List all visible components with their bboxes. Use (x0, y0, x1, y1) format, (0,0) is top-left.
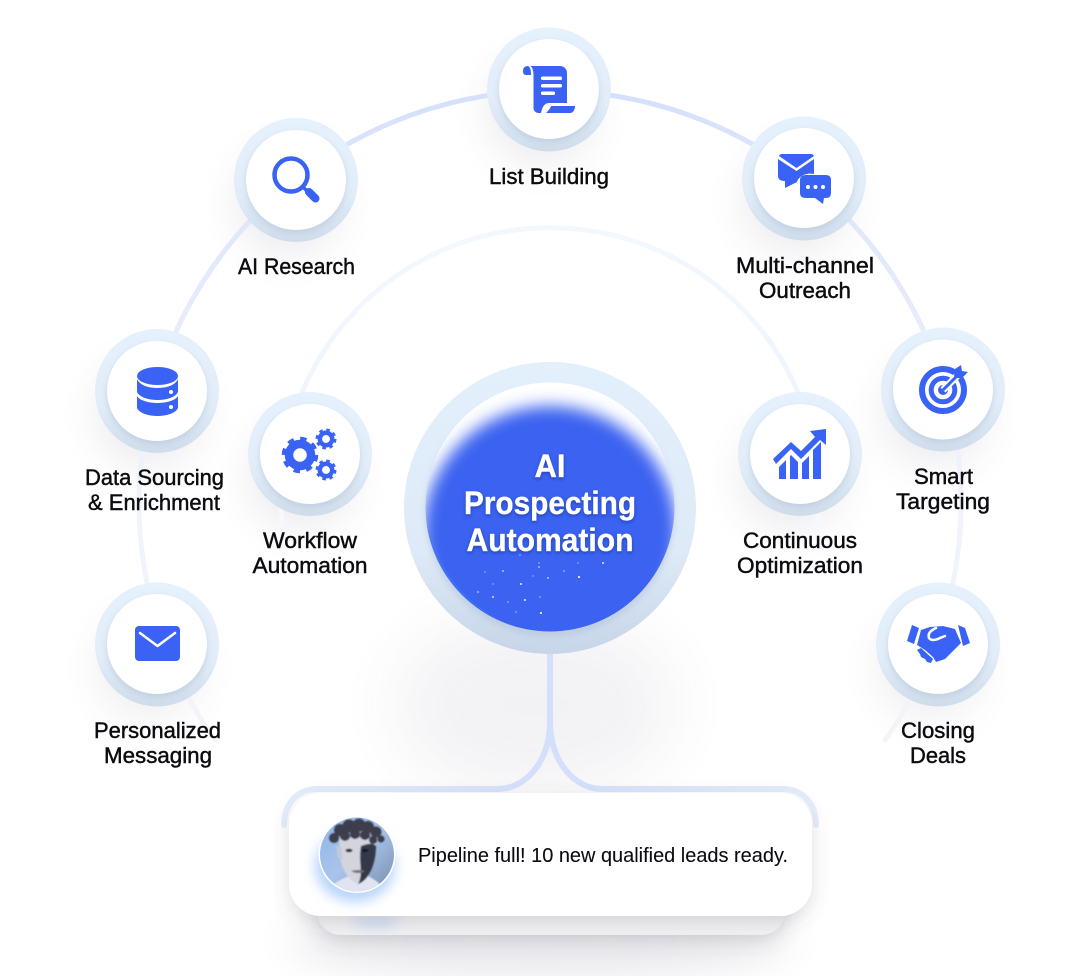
label: Smart Targeting: Smart (914, 464, 973, 489)
icon: database (137, 367, 178, 416)
label: Workflow Automation: Workflow (263, 528, 357, 553)
label: Workflow Automation (252, 528, 368, 578)
icon: scroll (523, 66, 575, 113)
icon: rising bar chart (773, 429, 826, 479)
hub title: Prospecting (464, 485, 636, 521)
label: Continuous Optimization: Continuous (743, 528, 857, 553)
avatar glow (315, 830, 395, 902)
avatar portrait (318, 815, 396, 894)
label: Closing Deals (901, 718, 975, 768)
label: Closing Deals: Closing (901, 718, 975, 743)
notification card (289, 793, 812, 916)
notification card back layer (317, 860, 785, 935)
icon: handshake (907, 625, 970, 663)
icon: envelope (135, 626, 180, 661)
label: Workflow Automation: Automation (252, 553, 368, 578)
label: Closing Deals: Deals (910, 743, 966, 768)
label: Personalized Messaging: Messaging (104, 743, 212, 768)
central hub: AI Prospecting Automation (404, 362, 696, 660)
label: Personalized Messaging: Personalized (94, 718, 221, 743)
label: Multi-channel Outreach: Outreach (759, 278, 851, 303)
label: Data Sourcing and Enrichment: & Enrichment (88, 490, 220, 515)
label: Data Sourcing and Enrichment: Data Sourcing (85, 465, 224, 490)
node: List Building (487, 28, 611, 152)
hub title: AI (534, 448, 566, 484)
node: Continuous Optimization (738, 392, 862, 516)
label: List Building: List Building (489, 164, 609, 189)
node: Multi-channel Outreach (742, 116, 866, 240)
avatar glow on back card (351, 913, 399, 929)
hub title: Automation (466, 522, 634, 558)
icon: envelope and chat bubble (778, 154, 831, 204)
icon: gears (284, 430, 335, 479)
icon: target with arrow (922, 365, 968, 411)
soft ambient shadows (97, 60, 987, 976)
label: Personalized Messaging (94, 718, 221, 768)
label: Continuous Optimization (737, 528, 863, 578)
label: Continuous Optimization: Optimization (737, 553, 863, 578)
label: Multi-channel Outreach: Multi-channel (736, 253, 874, 278)
node: Closing Deals (876, 582, 1000, 706)
notification message: Pipeline full! 10 new qualified leads ready. (418, 845, 788, 867)
label: Data Sourcing and Enrichment (85, 465, 224, 515)
hub sparkle dots (477, 554, 604, 614)
node: Data Sourcing and Enrichment (95, 329, 219, 453)
label: Smart Targeting: Targeting (896, 489, 990, 514)
inner orbit arc (281, 228, 819, 540)
node: Workflow Automation (248, 392, 372, 516)
connector lines from hub to card (284, 650, 816, 825)
hub title (464, 448, 636, 558)
label: Smart Targeting (896, 464, 990, 514)
node: AI Research (234, 118, 358, 242)
label: AI Research: AI Research (238, 254, 355, 279)
icon: magnifier (274, 158, 316, 198)
node: Personalized Messaging (95, 582, 219, 706)
node: Smart Targeting (881, 328, 1005, 452)
outer orbit arc (139, 91, 961, 740)
label: Multi-channel Outreach (736, 253, 874, 303)
